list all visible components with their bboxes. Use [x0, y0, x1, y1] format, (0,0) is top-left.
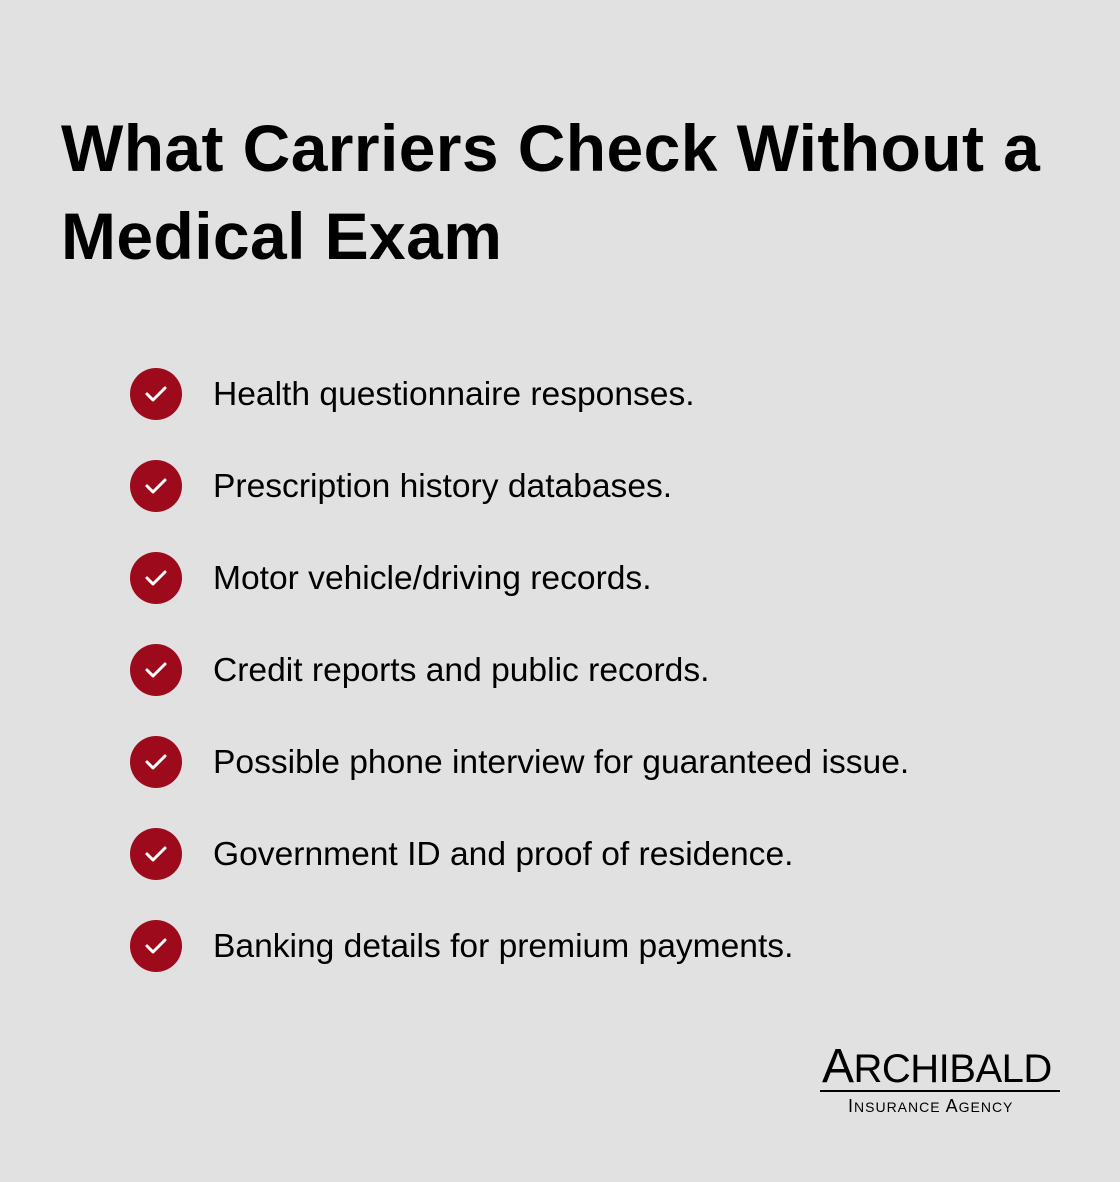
item 4: [130, 644, 709, 696]
logo: [820, 1040, 1060, 1116]
item 1: Health questionnaire responses.: [213, 376, 695, 413]
logo: ARCHIBALD: [822, 1040, 1052, 1093]
item 3: Motor vehicle/driving records.: [213, 560, 652, 597]
item 7: [130, 920, 793, 972]
item 3: [130, 552, 652, 604]
logo: INSURANCE AGENCY: [848, 1096, 1013, 1116]
item 5: [130, 736, 909, 788]
item 7: Banking details for premium payments.: [213, 928, 793, 965]
item 5: Possible phone interview for guaranteed issue.: [213, 744, 909, 781]
item 6: [130, 828, 793, 880]
item 2: [130, 460, 672, 512]
item 4: Credit reports and public records.: [213, 652, 709, 689]
item 1: [130, 368, 695, 420]
item 6: Government ID and proof of residence.: [213, 836, 793, 873]
title: What Carriers Check Without a Medical Exam: [61, 111, 1040, 273]
item 2: Prescription history databases.: [213, 468, 672, 505]
